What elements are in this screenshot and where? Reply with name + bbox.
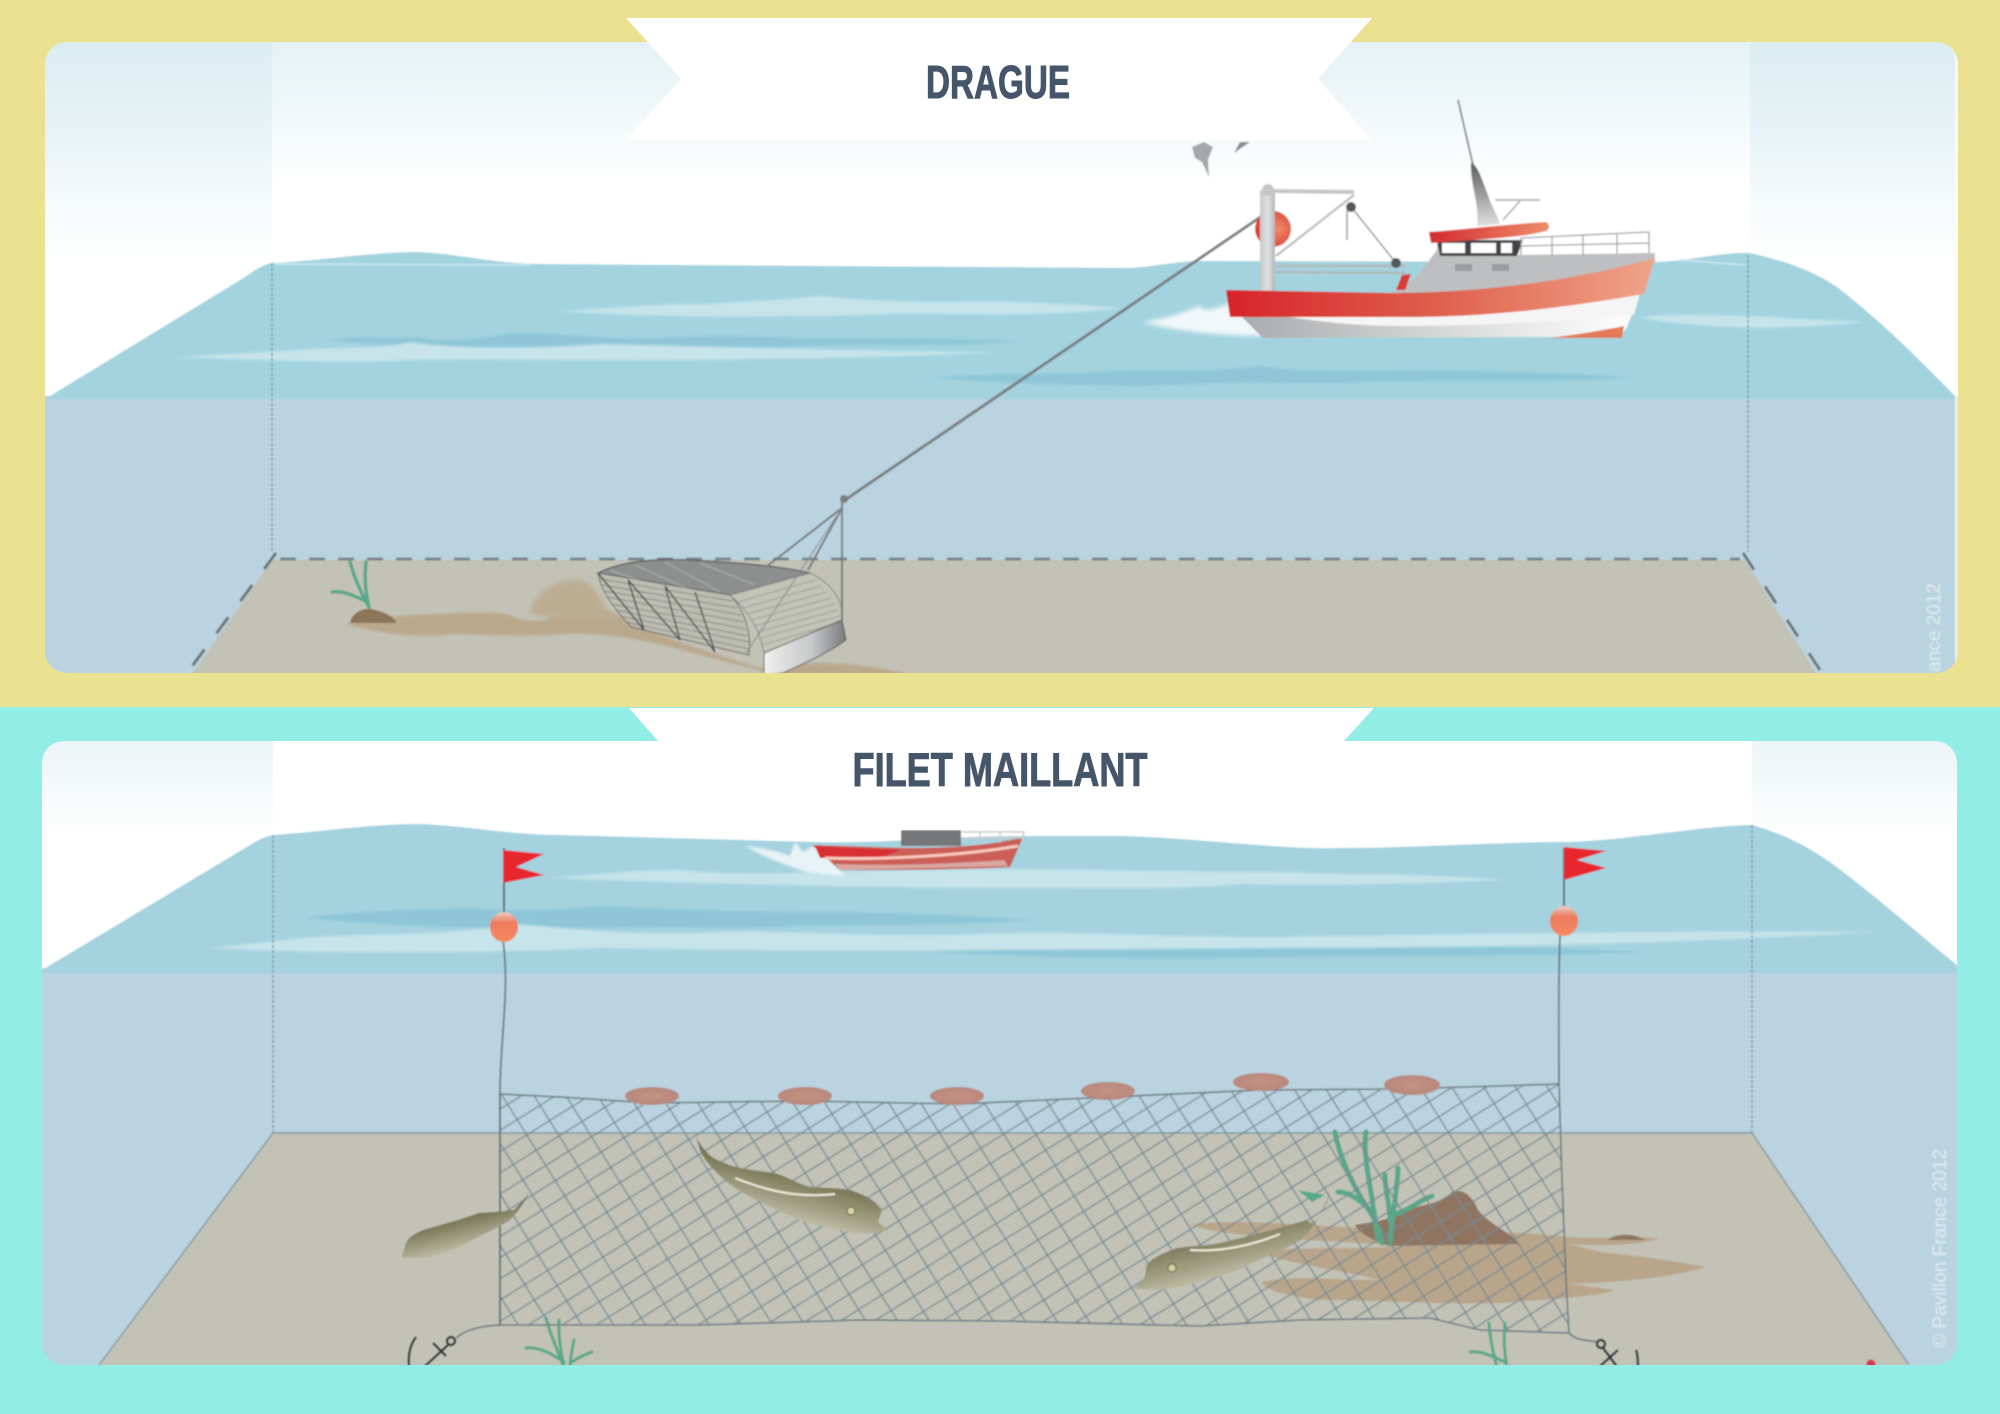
- anchor left: [409, 1325, 500, 1368]
- sky centre: [272, 42, 1750, 146]
- cabin: [901, 830, 961, 846]
- seaweed right: [1470, 1323, 1507, 1368]
- cabin: [1392, 240, 1655, 295]
- sea streaks: [173, 260, 1865, 386]
- dredge side cage: [598, 573, 750, 655]
- guide lines: [273, 825, 1752, 1133]
- water column: [36, 968, 1963, 1373]
- dashed floor outline: [280, 558, 1740, 560]
- fish centre: [696, 1137, 888, 1234]
- perspective guide lines: [272, 255, 1748, 552]
- dashed right corner: [1743, 553, 1822, 673]
- ribbon shape: [626, 18, 1372, 140]
- net frame: [500, 1084, 1569, 1333]
- sea floor: [93, 1133, 1915, 1373]
- sky right side: [1750, 42, 1958, 208]
- left buoy: [490, 912, 518, 942]
- boat wake: [1142, 302, 1264, 336]
- seaweed left: [526, 1318, 592, 1368]
- ribbon shape: [629, 708, 1374, 830]
- gantry rigging: [1268, 191, 1354, 192]
- deck rail: [1521, 232, 1649, 255]
- rock: [350, 609, 396, 623]
- right buoy line: [1559, 935, 1560, 1084]
- left marker flag: [490, 848, 544, 942]
- fish right: [1134, 1190, 1330, 1290]
- hull lower: [1240, 293, 1640, 338]
- ribbon: Filet maillant: [629, 708, 1374, 830]
- copyright: © Pavillon France 2012: [1930, 1149, 1951, 1348]
- panel: dredge scene: [45, 42, 1958, 673]
- dashed left corner: [187, 553, 276, 673]
- radar mast: [1471, 163, 1500, 226]
- ribbon: Drague: [626, 18, 1372, 140]
- dredge bridle: [766, 500, 842, 620]
- sediment patch: [1190, 1222, 1706, 1303]
- background: yellow band: [0, 0, 2000, 707]
- sky right side: [1752, 736, 1963, 836]
- cabin windows: [1437, 240, 1523, 256]
- hull white stripe: [1290, 293, 1640, 326]
- floor edges: [99, 1133, 1909, 1365]
- sea surface: [45, 252, 1958, 399]
- antenna: [1458, 100, 1473, 165]
- gallows mast: [1260, 190, 1275, 292]
- tow line: [842, 216, 1262, 502]
- dredge: [598, 500, 846, 676]
- keel: [1550, 326, 1624, 338]
- sea streaks: [210, 869, 1875, 959]
- sea floor: [187, 560, 1821, 681]
- large rock: [1355, 1191, 1520, 1246]
- sea surface: [42, 824, 1957, 973]
- tow line swivel: [840, 495, 848, 503]
- red marker: [1866, 1360, 1876, 1368]
- large seaweed: [1335, 1132, 1432, 1244]
- gillnet: [480, 935, 1590, 1350]
- background: turquoise band: [0, 707, 2000, 1414]
- white sky base: [36, 736, 1963, 976]
- right buoy: [1550, 906, 1578, 936]
- fishing boat: [1226, 100, 1655, 338]
- seagulls: [1192, 142, 1250, 177]
- hull red band: [1226, 258, 1655, 317]
- left buoy line: [500, 940, 505, 1325]
- anchor right: [1569, 1333, 1638, 1368]
- dredge hoop: [730, 573, 843, 653]
- floats: [625, 1073, 1440, 1105]
- sky left side: [36, 736, 273, 836]
- rail: [962, 832, 1024, 844]
- fish left: [402, 1192, 529, 1258]
- right edge highlight: [1955, 42, 1958, 662]
- panel: gillnet scene: [36, 736, 1963, 1373]
- title: DRAGUE: [926, 56, 1070, 108]
- distant boat: [745, 830, 1024, 876]
- copyright: © Pavillon France 2012: [1924, 583, 1945, 781]
- net mesh: [480, 1070, 1590, 1350]
- sediment trail: [345, 580, 920, 676]
- seaweed: [332, 562, 369, 607]
- small rock: [1608, 1235, 1645, 1240]
- dredge top cage: [598, 560, 810, 595]
- right marker flag: [1550, 847, 1606, 936]
- sky left side: [45, 42, 272, 208]
- dredge blade: [764, 620, 846, 676]
- white sky base: [45, 182, 1958, 397]
- water column: [40, 396, 1965, 681]
- hull: [812, 837, 1023, 870]
- wake: [745, 842, 845, 876]
- title: FILET MAILLANT: [852, 743, 1148, 796]
- red buoy on gantry: [1255, 211, 1291, 247]
- portholes: [1455, 264, 1472, 271]
- red winch: [1396, 274, 1411, 290]
- wheelhouse roof: [1429, 222, 1549, 243]
